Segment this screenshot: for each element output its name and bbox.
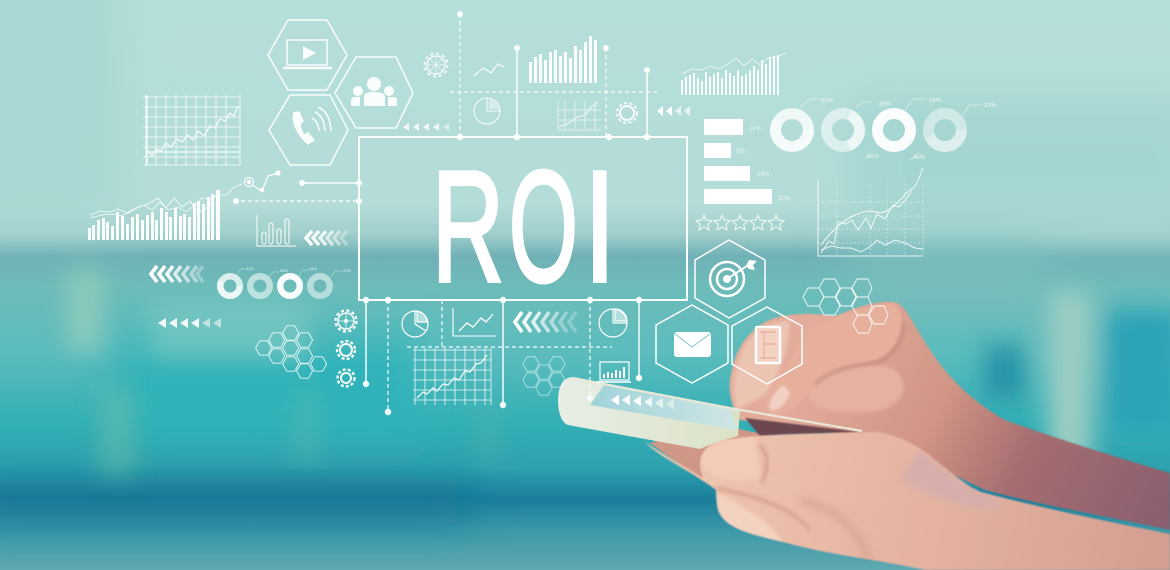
title: ROI: R	[432, 137, 504, 315]
ROI frame with connectors	[233, 11, 687, 415]
upper hand holding stylus finger	[730, 302, 1170, 530]
icon: laptop with bars	[596, 362, 631, 382]
icon: tablet hexagon	[732, 307, 802, 384]
icon: target hexagon	[695, 240, 765, 318]
bar list with percentages: 12%	[749, 126, 762, 132]
bar list with percentages	[704, 119, 791, 204]
icon: small growth chart	[558, 100, 601, 130]
icon: gear right	[617, 103, 637, 123]
arrows: row right of connectors	[657, 106, 690, 116]
title: ROI	[432, 137, 616, 316]
arrows: chevrons bottom centre	[515, 312, 576, 332]
icon: phone call hexagon	[269, 95, 348, 165]
icon: small line chart top	[474, 64, 504, 76]
icon: gear top	[424, 54, 448, 76]
rating stars	[696, 215, 784, 230]
title: ROI: O	[509, 139, 578, 316]
donut charts left	[220, 266, 351, 296]
icon: gear stack	[336, 310, 356, 386]
donut charts left: 24%	[309, 266, 317, 271]
donut charts left: 36%	[280, 268, 288, 273]
hexagon cluster left	[256, 326, 327, 378]
donut charts right	[776, 98, 997, 161]
donut charts right: 62%	[821, 98, 834, 104]
donut charts right: 51%	[867, 154, 880, 160]
arrows: triangles left	[158, 318, 221, 328]
donut charts left: 20%	[343, 268, 351, 273]
icon: pie top	[474, 98, 500, 124]
bar list with percentages: 14%	[757, 172, 770, 178]
arrows: chevrons left lower	[151, 266, 203, 282]
icon: outline bar chart	[257, 215, 296, 246]
chart: bars with lines, left	[88, 184, 242, 240]
chart: growth grid	[143, 95, 240, 165]
icon: pie bottom right	[599, 309, 627, 337]
arrows on phone screen	[611, 394, 674, 410]
hexagon cluster right	[803, 279, 888, 333]
arrows: chevrons left upper	[306, 231, 347, 245]
donut charts right: 24%	[929, 98, 942, 104]
donut charts right: 20%	[984, 103, 997, 109]
icon: pie bottom left	[402, 311, 428, 337]
chart: bars top centre	[529, 36, 597, 83]
chart: bars with lines, top right	[681, 53, 786, 95]
icon: small trend dot line	[244, 171, 280, 192]
icon: line chart box	[453, 308, 496, 336]
smartphone	[558, 377, 862, 482]
chart: growth grid bottom	[413, 348, 491, 405]
bar list with percentages: 9%	[736, 149, 745, 155]
donut charts right: 35%	[879, 102, 892, 108]
icon: people hexagon	[335, 57, 413, 128]
donut charts right: 45%	[913, 155, 926, 161]
icon: video hexagon	[268, 20, 347, 90]
donut charts left: 43%	[246, 266, 254, 271]
hexagon cluster bottom centre	[523, 357, 565, 395]
lower hand holding phone	[645, 432, 1170, 570]
title: ROI: I	[584, 139, 616, 315]
chart: line chart right	[818, 168, 923, 256]
icon: mail hexagon	[656, 305, 728, 383]
bar list with percentages: 20%	[778, 196, 791, 202]
arrows: row above frame	[403, 123, 449, 131]
